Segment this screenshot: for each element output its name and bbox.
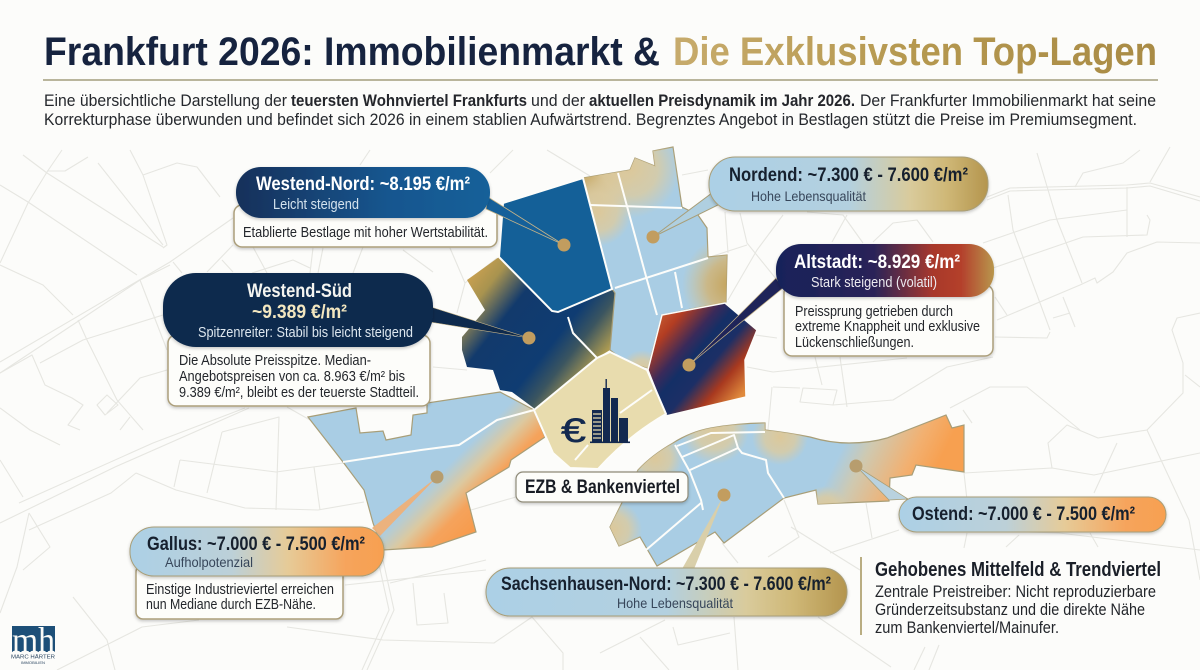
callout: Nordend: [646, 157, 988, 244]
title: Frankfurt 2026: Immobilienmarkt &: [44, 30, 660, 74]
pointer: [682, 278, 783, 372]
price pill: Leicht steigend: [273, 197, 359, 213]
price pill: [486, 568, 847, 616]
callout: Gallus: [130, 470, 444, 619]
pointer: [430, 307, 536, 344]
map: Frankfurt districts: [308, 118, 964, 566]
pointer: [682, 488, 730, 569]
pointer: [646, 193, 720, 244]
price pill: Nordend: ~7.300 € - 7.600 €/m²: [729, 165, 968, 186]
logo: Marc Härter Immobilien: MARC HÄRTER: [11, 654, 55, 660]
description box: 9.389 €/m², bleibt es der teuerste Stadtteil.: [179, 385, 419, 401]
description box: [136, 565, 343, 619]
district: Westend-Nord: [499, 178, 612, 312]
price pill: Altstadt: ~8.929 €/m²: [794, 252, 960, 273]
intro text: und der: [531, 92, 585, 110]
description box: Preissprung getrieben durch: [795, 304, 953, 320]
street map background: [0, 147, 1200, 670]
district: Nordend: [584, 146, 728, 368]
pointer: [486, 197, 570, 252]
icon: euro and skyline: [561, 379, 630, 450]
price pill: [776, 244, 994, 297]
description box: extreme Knappheit und exklusive: [795, 319, 980, 335]
title: Die Exklusivsten Top-Lagen: [673, 30, 1157, 74]
label: EZB und Bankenviertel: [516, 472, 688, 502]
price pill: ~9.389 €/m²: [252, 302, 347, 323]
callout: Ostend: [850, 460, 1166, 532]
district: Westend-Süd: [462, 257, 615, 409]
price pill: Hohe Lebensqualität: [751, 188, 866, 204]
price pill: Ostend: ~7.000 € - 7.500 €/m²: [912, 504, 1135, 525]
callout: Westend-Nord: [234, 167, 570, 252]
pointer: [372, 470, 444, 536]
price pill: Stark steigend (volatil): [811, 275, 937, 291]
district: Sachsenhausen and Ostend: [609, 414, 965, 567]
description box: [784, 285, 993, 356]
price pill: Westend-Nord: ~8.195 €/m²: [256, 174, 470, 195]
price pill: [709, 157, 988, 211]
text block: Gehobenes Mittelfeld: zum Bankenviertel/Mainufer.: [875, 618, 1059, 637]
logo: Marc Härter Immobilien: mh: [12, 620, 55, 660]
price pill: [236, 167, 490, 218]
description box: Angebotspreisen von ca. 8.963 €/m² bis: [179, 369, 405, 385]
label: EZB und Bankenviertel: EZB & Bankenviertel: [525, 477, 680, 498]
callout: Altstadt: [682, 244, 994, 372]
intro text: teuersten Wohnviertel Frankfurts: [291, 92, 527, 110]
callout: Westend-Süd: [163, 273, 536, 406]
intro text: [44, 92, 1156, 129]
district: Altstadt: [648, 303, 757, 416]
description box: Einstige Industrieviertel erreichen: [146, 582, 334, 598]
intro text: Eine übersichtliche Darstellung der: [44, 92, 287, 110]
description box: Etablierte Bestlage mit hoher Wertstabilität.: [243, 225, 488, 241]
price pill: Westend-Süd: [247, 281, 352, 302]
intro text: aktuellen Preisdynamik im Jahr 2026.: [589, 92, 855, 110]
price pill: Aufholpotenzial: [165, 554, 253, 570]
price pill: Sachsenhausen-Nord: ~7.300 € - 7.600 €/m²: [501, 574, 831, 595]
callout: Sachsenhausen-Nord: [486, 488, 847, 616]
description box: Lückenschließungen.: [795, 335, 914, 351]
price pill: [130, 527, 384, 576]
pointer: [850, 460, 908, 500]
intro text: Der Frankfurter Immobilienmarkt hat seine: [860, 92, 1156, 110]
description box: Die Absolute Preisspitze. Median-: [179, 353, 371, 369]
text block: Gehobenes Mittelfeld: [860, 557, 1161, 637]
logo: Marc Härter Immobilien: IMMOBILIEN: [21, 660, 45, 665]
price pill: [899, 497, 1166, 532]
title: [44, 30, 1157, 74]
icon: euro and skyline: €: [561, 412, 586, 450]
description box: [168, 335, 430, 406]
intro text: Korrekturphase überwunden und befindet sich 2026 in einem stablien Aufwärtstrend. Begrenztes Angebot in Bestlagen stützt die Preise im Premiumsegment.: [44, 111, 1137, 129]
price pill: Hohe Lebensqualität: [617, 595, 733, 611]
description box: [234, 205, 497, 247]
description box: nun Mediane durch EZB-Nähe.: [146, 597, 316, 613]
price pill: Gallus: ~7.000 € - 7.500 €/m²: [147, 534, 365, 555]
price pill: [163, 273, 433, 347]
district: EZB und Bankenviertel: [534, 352, 666, 469]
text block: Gehobenes Mittelfeld: Gründerzeitsubstanz und die direkte Nähe: [875, 600, 1145, 619]
text block: Gehobenes Mittelfeld: Zentrale Preistreiber: Nicht reproduzierbare: [875, 582, 1156, 601]
price pill: Spitzenreiter: Stabil bis leicht steigend: [198, 324, 413, 341]
district: Gallus: [308, 392, 545, 550]
